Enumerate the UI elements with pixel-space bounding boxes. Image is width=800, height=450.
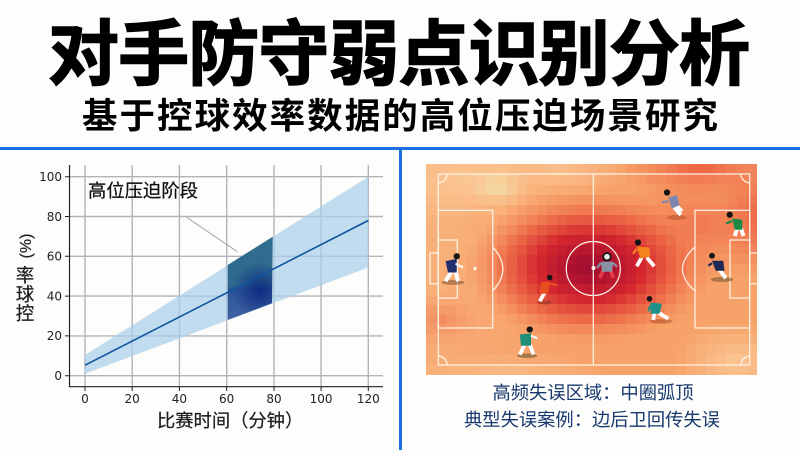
y axis tick labels: 40 [47,290,62,304]
heatmap caption: 典型失误案例：边后卫回传失误 [464,409,720,430]
panel dividers [0,147,800,450]
heatmap caption: 高频失误区域：中圈弧顶 [492,382,694,403]
y axis tick labels [39,170,62,383]
axes [70,165,383,387]
x axis tick labels: 120 [357,392,380,406]
tick marks [65,177,368,391]
player: orange midfielder [537,275,557,304]
player: orange forward [633,239,654,266]
annotation leader line [187,217,237,252]
confidence band [85,177,368,374]
y axis title: 率 [16,265,34,286]
x axis tick labels: 20 [125,392,140,406]
pitch markings [430,174,758,365]
title: 对手防守弱点识别分析 [48,16,750,95]
subtitle: 基于控球效率数据的高位压迫场景研究 [82,96,718,136]
x axis tick labels: 40 [172,392,187,406]
chart grid [70,165,383,387]
heatmap caption [464,382,720,430]
y axis tick labels: 20 [47,329,62,343]
y axis title: 控 [16,303,34,324]
x axis tick labels: 100 [310,392,333,406]
x axis tick labels: 80 [266,392,282,406]
pitch spots [473,266,596,270]
y axis tick labels: 100 [39,170,62,184]
y axis tick labels: 60 [47,250,62,264]
x axis title: 比赛时间（分钟） [157,410,303,431]
player: teal midfielder [647,296,672,324]
player: grey-blue winger [662,189,687,220]
y axis tick labels: 0 [54,369,62,383]
player: green defender [726,212,744,236]
annotation label: 高位压迫阶段 [88,180,198,201]
x axis tick labels: 60 [219,392,234,406]
x axis tick labels [81,392,380,406]
player: grey centre player [597,253,617,278]
panel: pitch heatmap [426,164,758,375]
y axis title [16,234,35,324]
y axis title: 球 [16,284,35,305]
player: navy defender [708,253,733,282]
y axis tick labels: 80 [47,210,62,224]
x axis tick labels: 0 [81,392,89,406]
panel: possession line chart [16,165,383,431]
heatmap [426,164,757,375]
high press highlight region [228,237,273,320]
y axis title: (%) [18,234,35,258]
player: green midfielder [517,326,537,358]
trend line [85,220,368,365]
player: navy goalkeeper side [442,253,464,285]
